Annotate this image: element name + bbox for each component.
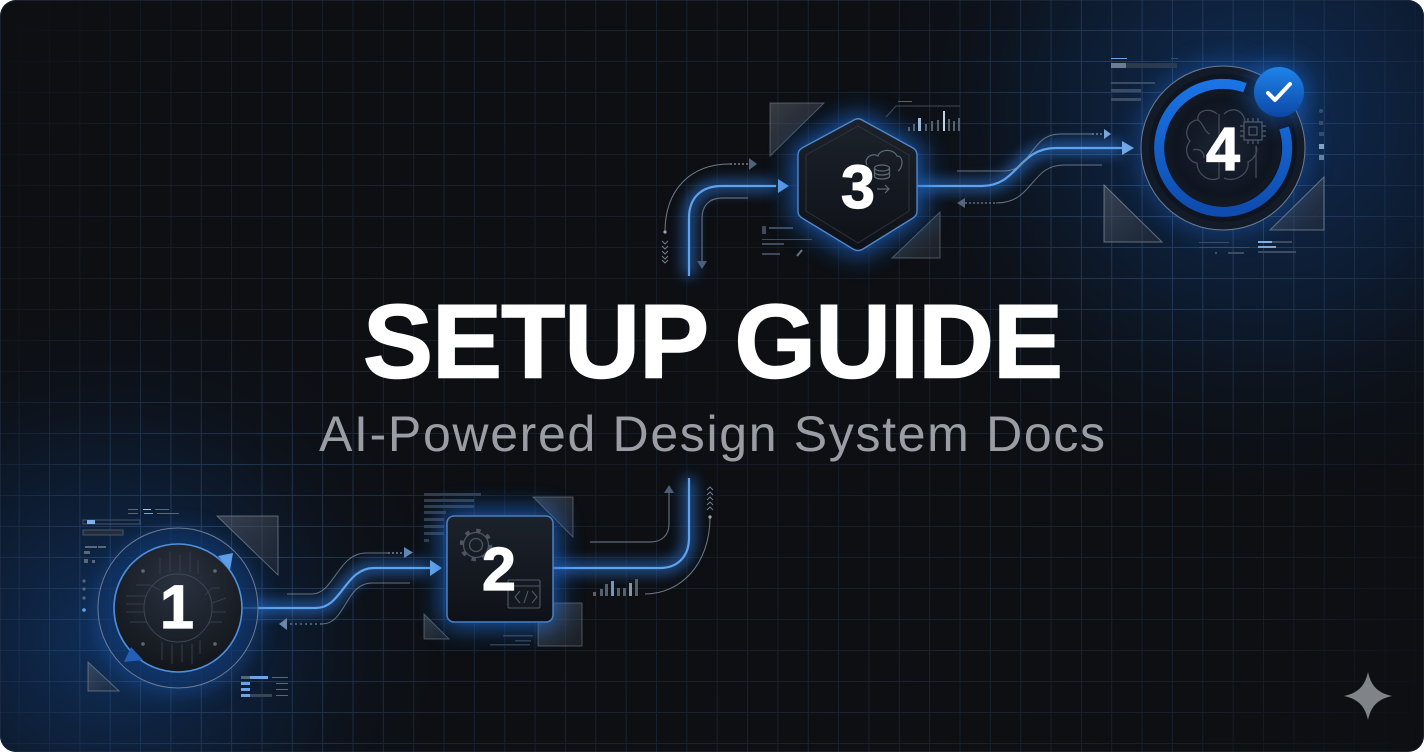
glass triangles step 3: [770, 103, 940, 258]
step 4 readouts: [1111, 58, 1324, 254]
number 2: 2: [482, 535, 516, 603]
title: SETUP GUIDE: [363, 284, 1063, 400]
circuit traces: [126, 552, 226, 664]
mini bar chart step 3: [886, 101, 960, 131]
icon: gear: [462, 530, 490, 560]
step 3: hexagon node: [762, 101, 960, 258]
progress ring: [1159, 84, 1287, 212]
icon: cloud database: [866, 150, 902, 193]
icon: sparkle watermark: [1344, 672, 1392, 720]
icon: chip: [1240, 118, 1266, 144]
step 4: completed circular node: [1104, 58, 1324, 254]
step 1: circular node: [82, 509, 288, 697]
number 1: 1: [160, 573, 194, 641]
connector: step 3 to step 4: [917, 129, 1134, 208]
number 3: 3: [841, 153, 875, 221]
icon: code window: [508, 580, 540, 608]
blue ring markers: [124, 553, 233, 662]
step 1 data readouts: [82, 509, 288, 697]
mini bar chart step 2: [593, 579, 638, 596]
subtitle: AI-Powered Design System Docs: [319, 406, 1105, 462]
connector: title to step 3: [662, 158, 789, 276]
glass triangles step 1: [88, 516, 278, 691]
number 4: 4: [1206, 115, 1240, 183]
step 3 notes: [762, 226, 812, 256]
glass triangles step 4: [1104, 177, 1324, 242]
icon: brain: [1187, 110, 1257, 180]
glass shapes step 2: [424, 497, 582, 646]
connector: step 2 toward title: [553, 478, 713, 594]
step 2: square node: [424, 493, 638, 646]
step 2 code lines: [424, 493, 533, 646]
connector: step 1 to step 2: [243, 547, 442, 630]
icon: check badge: [1251, 64, 1307, 120]
